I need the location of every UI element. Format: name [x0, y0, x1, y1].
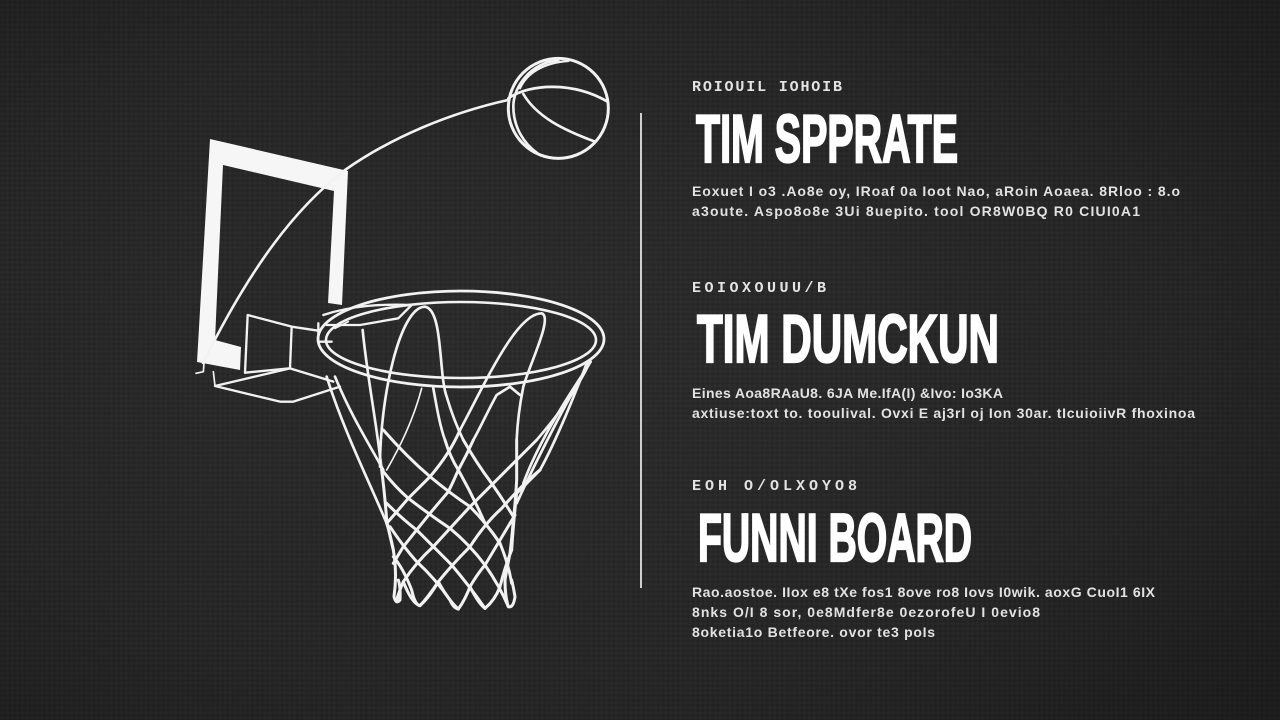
- heading 2: TIM DUMCKUN: [697, 301, 999, 377]
- body 1: [692, 183, 1180, 219]
- body 1: a3oute. Aspo8o8e 3Ui 8uepito. tool OR8W0BQ R0 CIUI0A1: [692, 203, 1140, 219]
- body 2: [692, 385, 1195, 421]
- heading 1: TIM SPPRATE: [696, 101, 958, 177]
- eyebrow 2: EOIOXOUUU/B: [692, 280, 826, 297]
- icon: net: [327, 307, 591, 609]
- text block: section 2: [692, 280, 1195, 421]
- heading 3: FUNNI BOARD: [698, 500, 972, 576]
- body 3: [692, 584, 1156, 640]
- divider: [640, 113, 642, 588]
- body 2: axtiuse:toxt to. tooulival. Ovxi E aj3rl oj Ion 30ar. tIcuioiivR fhoxinoa: [692, 405, 1195, 421]
- illustration: basketball hoop: [196, 58, 608, 609]
- icon: hoop rim: [318, 291, 604, 387]
- body 1: Eoxuet I o3 .Ao8e oy, IRoaf 0a Ioot Nao, aRoin Aoaea. 8Rloo : 8.o: [692, 183, 1180, 199]
- body 3: 8nks O/I 8 sor, 0e8Mdfer8e 0ezorofeU I 0evio8: [692, 604, 1040, 620]
- icon: backboard: [197, 139, 348, 370]
- net: lower diamond mesh: [382, 430, 540, 609]
- eyebrow 3: EOH O/OLXOYO8: [692, 478, 857, 495]
- text block: section 1: [692, 79, 1180, 219]
- icon: rim bracket: [196, 305, 412, 402]
- arrow: ball trajectory: [203, 100, 508, 363]
- eyebrow 1: ROIOUIL IOHOIB: [692, 79, 842, 96]
- text block: section 3: [692, 478, 1156, 640]
- body 3: 8oketia1o Betfeore. ovor te3 poIs: [692, 624, 935, 640]
- icon: basketball: [508, 58, 608, 158]
- body 3: Rao.aostoe. IIox e8 tXe fos1 8ove ro8 Iovs I0wik. aoxG CuoI1 6IX: [692, 584, 1156, 600]
- body 2: Eines Aoa8RAaU8. 6JA Me.IfA(I) &Ivo: Io3KA: [692, 385, 1003, 401]
